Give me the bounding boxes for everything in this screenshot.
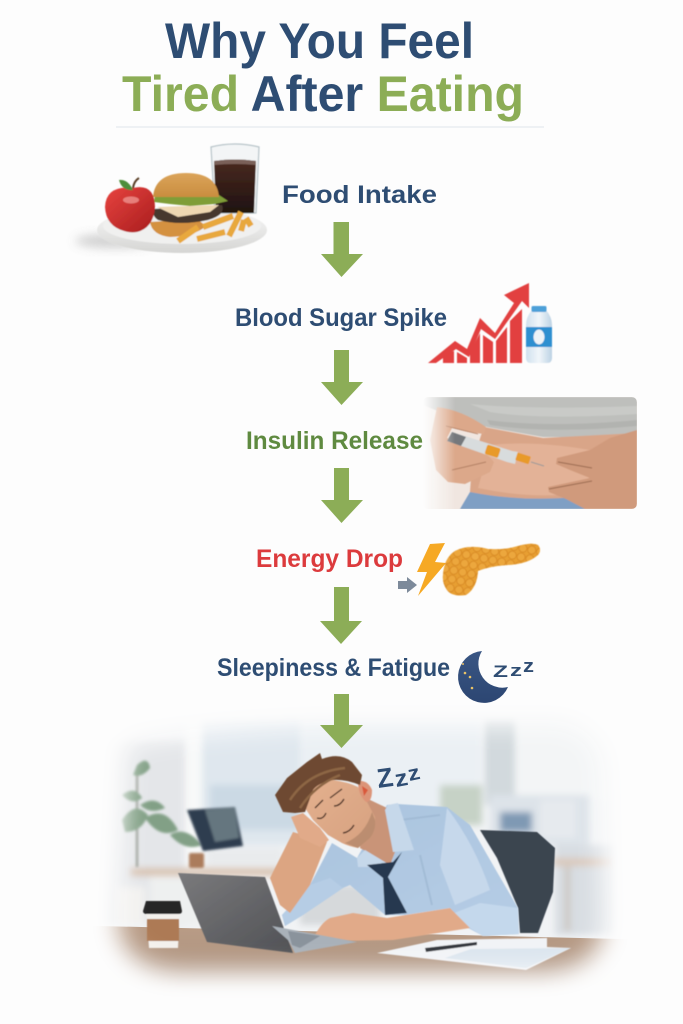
label: snoring Zzz over the man: z xyxy=(392,764,410,792)
icon: food plate with burger, apple, fries and cola xyxy=(75,144,267,253)
man xyxy=(270,753,519,941)
arrow 5 xyxy=(320,694,363,748)
icon: fries xyxy=(178,212,251,241)
heading: Blood Sugar Spike: Blood Sugar Spike xyxy=(235,304,447,332)
closed eyes, brows and mouth xyxy=(315,789,354,833)
tie xyxy=(367,852,407,915)
heading: Food Intake: Food Intake xyxy=(282,181,437,209)
torso and shirt xyxy=(310,804,518,934)
infographic canvas xyxy=(75,22,637,988)
arrow 2 xyxy=(321,350,363,405)
laptop xyxy=(178,873,357,953)
title line 1: Why You Feel xyxy=(165,13,474,69)
ear xyxy=(358,781,372,802)
icon: lightning bolt xyxy=(417,543,446,596)
arrow 4 xyxy=(320,587,362,644)
heading: Insulin Release: Insulin Release xyxy=(246,427,423,455)
icon: water bottle xyxy=(526,306,552,363)
title xyxy=(122,13,524,122)
hair xyxy=(275,753,362,813)
mug xyxy=(189,853,204,868)
right hand xyxy=(548,430,637,509)
label: snoring Zzz over the man: Z xyxy=(375,762,395,794)
left hand xyxy=(430,407,494,484)
neck xyxy=(360,798,395,865)
label: snoring Zzz over the man: z xyxy=(406,761,422,786)
arrow 3 xyxy=(321,468,363,523)
heading: Sleepiness & Fatigue: Sleepiness & Fatigue xyxy=(217,654,450,682)
abdomen skin xyxy=(470,427,624,500)
background monitor xyxy=(187,807,243,851)
icon: burger xyxy=(150,173,228,237)
label: Zzz next to moon: z xyxy=(510,661,522,680)
heading: Energy Drop: Energy Drop xyxy=(256,545,403,573)
icon: apple xyxy=(105,178,155,232)
label: Zzz next to moon: Z xyxy=(493,662,508,681)
label: Zzz next to moon xyxy=(493,656,534,681)
face xyxy=(305,780,375,848)
jeans xyxy=(460,492,590,509)
collar xyxy=(385,803,414,852)
title line 2: Tired After Eating xyxy=(122,66,524,122)
photo: tired office worker at desk xyxy=(102,720,618,988)
icon: rising red bar chart arrow xyxy=(428,283,529,363)
photo: insulin injection into abdomen xyxy=(423,397,637,509)
blurred office background xyxy=(102,720,618,988)
desk surface xyxy=(103,926,616,987)
icon: cola glass xyxy=(211,144,259,213)
plant xyxy=(122,761,202,867)
icon: crescent moon with stars xyxy=(458,651,508,703)
insulin pen xyxy=(447,432,544,466)
beard shadow xyxy=(345,812,375,848)
coffee cup xyxy=(143,901,182,948)
icon: pancreas xyxy=(443,544,540,595)
arrow 1 xyxy=(321,222,363,277)
papers and pen xyxy=(377,938,571,970)
propping hand xyxy=(291,813,329,847)
chair xyxy=(480,830,555,933)
label: Zzz next to moon: z xyxy=(523,656,534,676)
propping arm xyxy=(270,832,327,913)
icon: small grey arrow xyxy=(398,577,417,593)
grey shirt xyxy=(423,397,637,437)
label: snoring Zzz over the man xyxy=(375,761,422,794)
typing arm xyxy=(315,908,470,941)
